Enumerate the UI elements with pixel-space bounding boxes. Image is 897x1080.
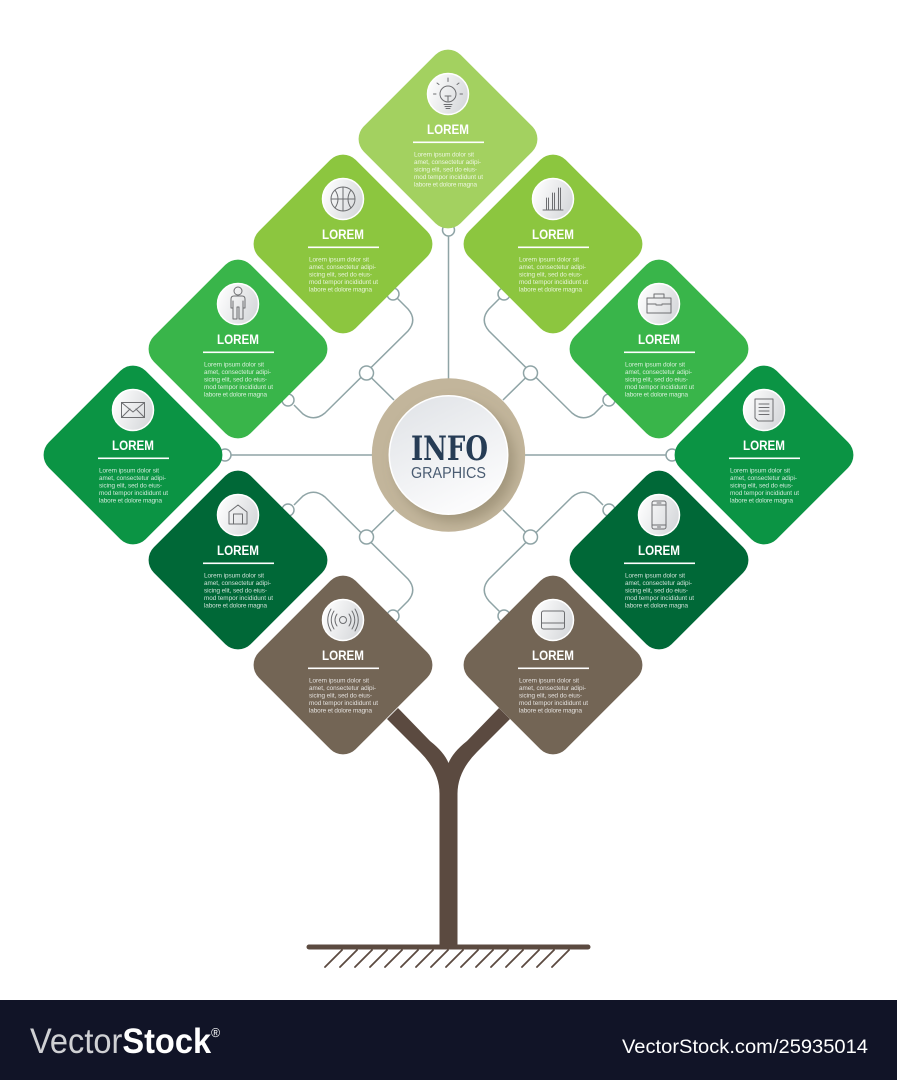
icon: signal waves [322,600,364,640]
divider [729,458,800,459]
body text: sicing elit, sed do eius- [414,166,477,174]
panel: house [141,463,335,657]
body text: amet, consectetur adipi- [414,159,481,166]
title: INFO: INFO [411,429,488,469]
body text: labore et dolore magna [625,602,688,610]
body text: amet, consectetur adipi- [309,685,376,692]
divider [308,668,379,669]
divider [518,668,589,669]
body text: labore et dolore magna [99,498,162,504]
body text: sicing elit, sed do eius- [625,588,688,594]
icon: document [744,390,784,430]
body text: Lorem ipsum dolor sit [204,572,264,580]
heading: LOREM [217,332,259,347]
body text: mod tempor incididunt ut [625,384,694,391]
body text: Lorem ipsum dolor sit [414,152,474,158]
body text: Lorem ipsum dolor sit [519,678,579,684]
body text: amet, consectetur adipi- [625,580,692,587]
tree trunk and branches [387,708,510,947]
footer bar [0,1000,897,1080]
body text: Lorem ipsum dolor sit [625,572,685,580]
connector lines [219,224,678,622]
central badge [372,378,525,532]
divider [624,352,695,353]
body text: amet, consectetur adipi- [309,264,376,271]
body text: mod tempor incididunt ut [519,700,588,707]
body text: amet, consectetur adipi- [204,580,271,587]
body text: Lorem ipsum dolor sit [99,468,159,474]
icon: bar chart [532,178,574,220]
body text: mod tempor incididunt ut [414,174,483,181]
icon: house [218,494,258,536]
panel: bar chart [456,147,650,341]
body text [204,362,273,398]
divider [308,246,379,248]
body text: mod tempor incididunt ut [204,384,273,391]
body text [309,256,378,294]
panel: top light green [351,42,545,236]
body text: sicing elit, sed do eius- [625,376,688,384]
body text: amet, consectetur adipi- [99,475,166,482]
body text: sicing elit, sed do eius- [309,272,372,278]
divider [518,246,589,248]
divider [413,142,484,143]
panel: person [141,252,335,446]
footer logo: ® [211,1025,220,1040]
panel: briefcase [562,252,756,446]
panel: basketball [246,147,440,341]
body text: mod tempor incididunt ut [625,595,694,602]
body text: Lorem ipsum dolor sit [519,256,579,264]
body text [99,468,168,504]
icon: light bulb [428,74,468,114]
body text: labore et dolore magna [204,392,267,398]
icon: briefcase [638,284,680,324]
heading: LOREM [532,227,574,242]
body text: amet, consectetur adipi- [519,264,586,271]
body text: Lorem ipsum dolor sit [625,362,685,368]
body text: mod tempor incididunt ut [309,279,378,286]
icon: envelope [112,390,154,430]
body text: Lorem ipsum dolor sit [309,678,369,684]
body text: mod tempor incididunt ut [730,490,799,497]
body text: Lorem ipsum dolor sit [309,256,369,264]
body text: sicing elit, sed do eius- [204,588,267,594]
panel: mail [36,358,230,552]
heading: LOREM [112,438,154,453]
body text: sicing elit, sed do eius- [309,692,372,700]
panel: tablet [456,568,650,762]
body text: labore et dolore magna [414,182,477,188]
body text: sicing elit, sed do eius- [730,482,793,490]
body text: labore et dolore magna [730,498,793,504]
heading: LOREM [217,543,259,558]
panel: document [667,358,861,552]
heading: LOREM [532,648,574,663]
panel: phone [562,463,756,657]
heading: LOREM [638,543,680,558]
body text: amet, consectetur adipi- [519,685,586,692]
body text: labore et dolore magna [309,708,372,714]
body text: Lorem ipsum dolor sit [730,468,790,474]
body text: labore et dolore magna [204,602,267,610]
body text [730,468,799,504]
subtitle: GRAPHICS: GRAPHICS [411,465,486,482]
divider [624,562,695,564]
body text [625,362,694,398]
panel: signal [246,568,440,762]
body text [519,678,588,714]
heading: LOREM [638,332,680,347]
body text: sicing elit, sed do eius- [519,272,582,278]
body text: sicing elit, sed do eius- [99,482,162,490]
body text: Lorem ipsum dolor sit [204,362,264,368]
body text: labore et dolore magna [519,286,582,294]
body text: amet, consectetur adipi- [204,369,271,376]
divider [98,458,169,459]
heading: LOREM [322,227,364,242]
icon: person [218,284,258,324]
body text [309,678,378,714]
body text: labore et dolore magna [309,286,372,294]
body text: mod tempor incididunt ut [309,700,378,707]
body text: mod tempor incididunt ut [204,595,273,602]
body text: labore et dolore magna [519,708,582,714]
body text: mod tempor incididunt ut [519,279,588,286]
icon: smartphone [638,494,680,536]
body text: sicing elit, sed do eius- [519,692,582,700]
body text [204,572,273,610]
heading: LOREM [743,438,785,453]
ground hatching [325,950,569,967]
body text: labore et dolore magna [625,392,688,398]
icon: basketball [322,178,364,220]
body text [625,572,694,610]
body text: amet, consectetur adipi- [625,369,692,376]
icon: tablet [532,600,574,640]
divider [203,562,274,564]
body text [519,256,588,294]
footer url: VectorStock.com/25935014 [622,1037,868,1058]
body text: sicing elit, sed do eius- [204,376,267,384]
body text [414,152,483,188]
body text: mod tempor incididunt ut [99,490,168,497]
body text: amet, consectetur adipi- [730,475,797,482]
heading: LOREM [427,122,469,137]
footer logo: VectorStock [30,1022,218,1061]
divider [203,352,274,353]
heading: LOREM [322,648,364,663]
ground line [309,944,588,950]
